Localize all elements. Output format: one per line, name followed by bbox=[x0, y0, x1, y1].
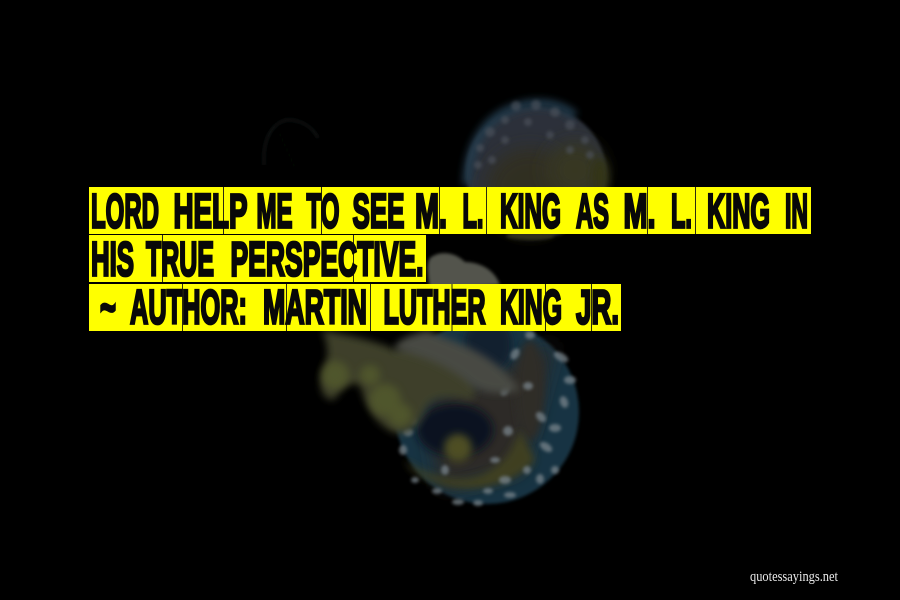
quote text line 1: LORD bbox=[91, 186, 159, 238]
quote text line 1: TO bbox=[306, 186, 340, 238]
quote text line 1 bbox=[91, 186, 808, 238]
quote text line 1: HELP bbox=[174, 186, 248, 238]
author text: JR. bbox=[576, 282, 619, 334]
quote text line 1: L. bbox=[462, 186, 484, 238]
bell inner folds bbox=[425, 340, 555, 490]
quote text line 2: HIS bbox=[91, 234, 134, 286]
quote text line 1: ME bbox=[256, 186, 292, 238]
yellow band line 2 bbox=[89, 235, 426, 282]
yellow band line 1 bbox=[89, 187, 811, 234]
quote text line 1: L. bbox=[671, 186, 692, 238]
jellyfish bell bbox=[395, 320, 579, 504]
pale tentacle mass bbox=[395, 330, 520, 393]
quote text line 1: M. bbox=[415, 186, 447, 238]
quote text line 1: SEE bbox=[352, 186, 404, 238]
author text: ~ bbox=[100, 282, 116, 334]
upper jellyfish bbox=[466, 100, 609, 240]
tentacle cluster bbox=[321, 330, 475, 433]
band segment seams line 3 bbox=[182, 284, 592, 331]
watermark: quotessayings.net bbox=[750, 569, 839, 585]
band segment seams line 1 bbox=[224, 187, 696, 234]
lower jellyfish bbox=[321, 253, 579, 506]
author text: KING bbox=[500, 282, 562, 334]
quote line 1: IN bbox=[785, 186, 808, 238]
band segment seams line 2 bbox=[162, 235, 354, 282]
author text: AUTHOR: bbox=[130, 282, 247, 334]
quote text line 1: AS bbox=[576, 186, 609, 238]
author text: MARTIN bbox=[263, 282, 367, 334]
bell spots bbox=[399, 331, 576, 506]
quote text line 2: PERSPECTIVE. bbox=[230, 234, 424, 286]
quote text line 2: TRUE bbox=[146, 234, 214, 286]
yellow band line 3 bbox=[89, 284, 621, 331]
author line bbox=[89, 282, 621, 334]
quote text line 1: M. bbox=[624, 186, 656, 238]
quote line 1 bbox=[89, 186, 811, 238]
quote text line 2 bbox=[91, 234, 424, 286]
small dark jellyfish bbox=[264, 120, 318, 170]
quote line 2 bbox=[89, 234, 426, 286]
quote text line 1: KING bbox=[500, 186, 561, 238]
author text: LUTHER bbox=[384, 282, 486, 334]
author text bbox=[100, 282, 619, 334]
quote text line 1: KING bbox=[707, 186, 770, 238]
yellow rim folds bbox=[405, 430, 535, 488]
